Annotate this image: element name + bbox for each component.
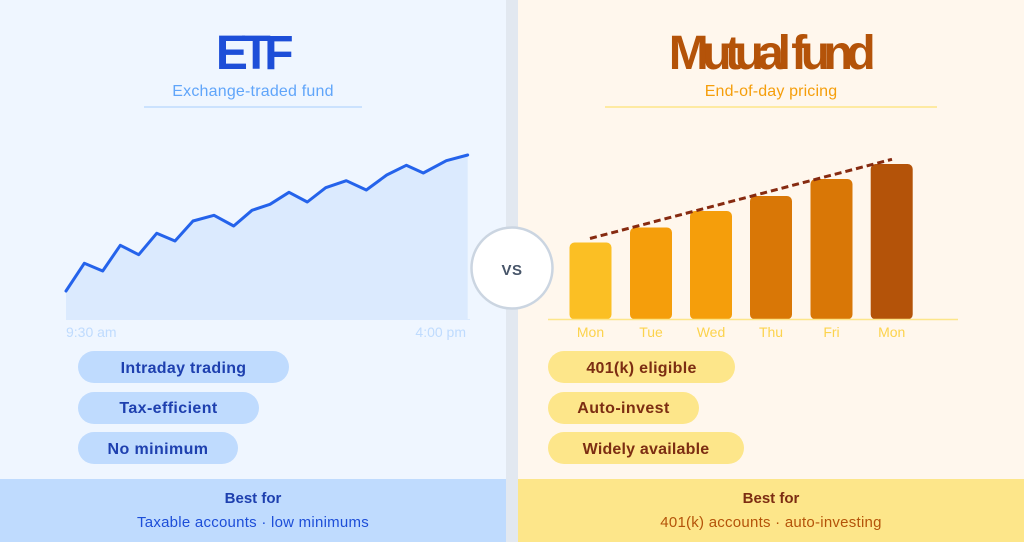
vs badge: VS bbox=[501, 262, 523, 279]
area chart: intraday price bbox=[66, 155, 470, 320]
axis labels: days: Thu bbox=[759, 324, 783, 340]
pill: Widely available bbox=[548, 432, 744, 464]
axis labels: days: Mon bbox=[878, 324, 905, 340]
axis labels: days bbox=[577, 324, 905, 340]
panel: Mutual fund bbox=[518, 0, 1024, 542]
pill: Intraday trading bbox=[78, 351, 289, 383]
footer: best for mutual fund bbox=[518, 479, 1024, 542]
divider bbox=[506, 0, 518, 542]
bar chart: daily closing prices bbox=[548, 159, 958, 320]
pill: Widely available: Widely available bbox=[583, 441, 709, 458]
pill: Auto-invest bbox=[548, 392, 699, 424]
pill: Intraday trading: Intraday trading bbox=[121, 360, 246, 377]
footer: best for ETF: Best for bbox=[225, 490, 281, 507]
footer: best for ETF: Taxable accounts · low minimums bbox=[137, 514, 369, 531]
pill: Tax-efficient bbox=[78, 392, 259, 424]
subtitle: Exchange-traded fund: Exchange-traded fund bbox=[172, 83, 334, 100]
pill: 401(k) eligible: 401(k) eligible bbox=[586, 360, 697, 377]
vs badge bbox=[472, 228, 552, 308]
axis labels: days: Fri bbox=[823, 324, 840, 340]
axis labels: days: Mon bbox=[577, 324, 604, 340]
footer: best for mutual fund: Best for bbox=[743, 490, 799, 507]
trend line bbox=[590, 159, 892, 238]
axis label: 4:00 pm: 4:00 pm bbox=[415, 324, 466, 340]
pill: 401(k) eligible bbox=[548, 351, 735, 383]
axis labels: days: Tue bbox=[639, 324, 663, 340]
pill: Auto-invest: Auto-invest bbox=[577, 400, 670, 417]
pill: Tax-efficient: Tax-efficient bbox=[119, 400, 218, 417]
footer: best for ETF bbox=[0, 479, 506, 542]
axis label: 9:30 am: 9:30 am bbox=[66, 324, 117, 340]
heading: Mutual fund: Mutual fund bbox=[669, 27, 873, 80]
axis labels: days: Wed bbox=[697, 324, 725, 340]
subtitle: End-of-day pricing: End-of-day pricing bbox=[705, 83, 837, 100]
heading: ETF: ETF bbox=[216, 27, 292, 80]
pill: No minimum: No minimum bbox=[108, 441, 208, 458]
pill: No minimum bbox=[78, 432, 238, 464]
panel: ETF bbox=[0, 0, 506, 542]
footer: best for mutual fund: 401(k) accounts · auto-investing bbox=[660, 514, 882, 531]
